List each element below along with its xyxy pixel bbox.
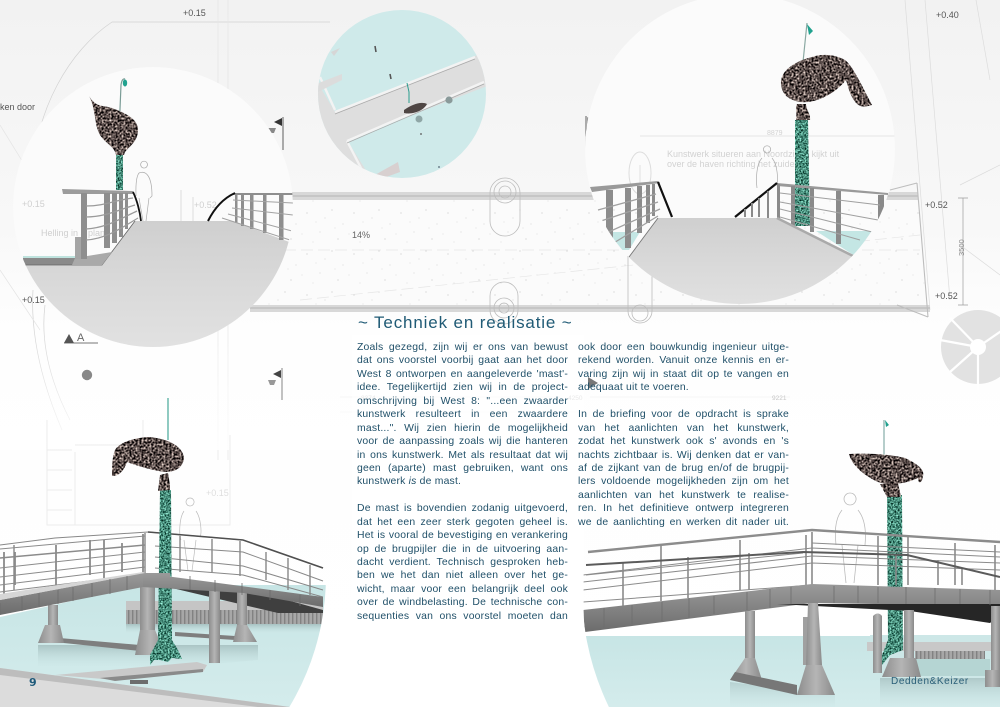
plan labels: 9221 [772,395,787,402]
deck surface [629,218,852,304]
text column: left: in ons kunstwerk. Met als resultaat dat wij [357,450,568,460]
text column: left: ben we het dan niet alleen over het ge- [357,570,568,581]
bridge girders [583,584,1000,632]
bridge plan deck with speckle [240,183,930,317]
text column: left: sequenties van ons voorstel moeten dan [357,611,568,622]
person [757,146,777,188]
mast and nest [89,79,138,190]
text column: left: over de windbelasting. De technische con- [357,597,568,608]
plan labels: +0.40 [936,10,959,20]
text column: left: Het is vooral de bevestiging en verankering [357,530,568,541]
text column: left: kunstwerk resulteert in een zwaardere [357,409,568,420]
mast and nest [849,420,923,670]
text column: left: idee. Tegelijkertijd zien wij in de project- [357,382,568,393]
brand name: Dedden&Keizer [891,676,969,687]
text column: right: ren. In het definitieve ontwerp integreren [578,503,789,514]
ghost labels: +0.52 [194,200,217,210]
person [835,493,865,583]
text column: right: varing zijn wij in staat dit op te vangen en [578,369,789,380]
right railing [208,193,293,240]
reflections [730,678,1000,696]
plan visible below railing [628,256,629,257]
circle: right bridge view: 8879 [767,130,783,137]
plan labels: 4250 [568,395,583,402]
water patches [610,232,640,250]
title: ~ Techniek en realisatie ~ [358,313,573,332]
plan labels: 14% [352,230,370,240]
plan labels: +0.15 [183,8,206,18]
text column: right: van het aanlichten van het kunstwerk, [578,423,789,434]
circle: right bridge view: Kunstwerk situeren aan Noordzijde, kijkt uit [667,149,840,159]
person [136,161,152,221]
left railing [62,189,141,259]
plan labels: +0.52 [935,291,958,301]
technical plan drawing backdrop [0,0,1000,460]
circle: top-view aerial [318,10,486,178]
plan labels: +0.52 [925,200,948,210]
plan labels: A [77,332,85,344]
person [180,498,201,571]
foreground quay and walkway [0,662,290,707]
rear railing [0,532,323,597]
text column: right: aanlichten van het kunstwerk te realise- [578,490,789,501]
circle: right bridge view [585,0,894,304]
text column: right: nachts zichtbaar is. Wij denken dat er van- [578,450,789,460]
railings [583,543,1000,602]
text column: left: voor de aanpassing zoals wij die hanteren [357,436,568,447]
pier markers on plan [490,165,652,324]
mast and nest [781,23,872,226]
text column: right: ook door een bouwkundig ingenieur uitge- [578,342,789,353]
text column: left [357,342,568,622]
deck surface [26,221,288,347]
text column: left: dacht verdient. Technisch gesproken heb- [357,557,568,568]
text column: left: Zoals gezegd, zijn wij er ons van bewust [357,342,568,353]
dimension 3500 [958,198,968,305]
circle: left bridge view [21,78,293,347]
bottom-left bridge scene: +0.15 [206,488,229,498]
section pie symbol [940,310,1000,390]
faint plan in scene [47,420,230,525]
ghost labels: Helling in a plan [41,228,105,238]
text column: left: dat ons voorstel voorbij gaat aan het door [357,355,568,366]
piers [38,586,257,663]
plan labels: 8374 [361,395,376,402]
white text panel [352,335,584,630]
left railing [590,181,672,248]
plan labels: +0.15 [22,295,45,305]
text column: left: omschrijving bij West 8: "...een zwaarder [357,396,568,407]
ghost labels: +0.15 [22,199,45,209]
plan labels [0,8,966,402]
text column: left: kunstwerk is de mast. [357,476,461,487]
text column: left: op de brugpijler die in de uitvoering aan- [357,544,568,555]
text column: left: De mast is bovendien zodanig uitgevoerd, [357,503,568,514]
right railing [735,183,888,256]
bridge girders [0,572,323,615]
far dock [126,601,323,630]
text column: right: zodat het kunstwerk ook s' avonds en 's [578,436,789,447]
far dock [867,642,1000,676]
text column: left: geen (aparte) mast gebruiken, want ons [357,463,568,474]
text column: right: adequaat uit te voeren. [578,382,689,393]
section markers [64,116,598,400]
front railing [0,536,145,592]
text column: right [578,342,789,528]
bottom-left bridge scene [0,398,330,707]
text column: left: wicht, maar voor een belangrijk deel ook [357,584,568,595]
ghost labels [22,199,217,238]
pier reflections [38,645,258,658]
text column: left: West 8 ontworpen en aangeleverde 'mast'- [357,369,568,380]
text column: left: dat het een zeer sterk gegoten geheel is. [357,517,568,528]
text column: right: af de zijkant van de brug en/of de brugpij- [578,463,789,474]
page number: 9 [29,676,37,689]
text column: left: mast...". Wij zien hierin de mogelijkheid [357,423,568,434]
water [0,585,330,707]
plan labels: ken door [0,102,35,112]
text column: right: rekend worden. Vanuit onze kennis en er- [578,355,789,366]
text column: right: lers voldoende mogelijkheden zijn om het [578,476,789,487]
under-bridge shadow [172,587,323,613]
plan labels: 3500 [957,239,966,256]
text column: right: In de briefing voor de opdracht is sprake [578,409,789,420]
piers [730,603,1000,695]
fade overlay toward text area [0,320,1000,450]
mast and nest [112,398,184,665]
water [570,636,1000,707]
text column: right: we de aanlichting en werken dit nader uit. [578,517,789,528]
bottom-right bridge scene [570,420,1000,707]
circle: right bridge view: over de haven richting het zuiden [667,159,800,169]
